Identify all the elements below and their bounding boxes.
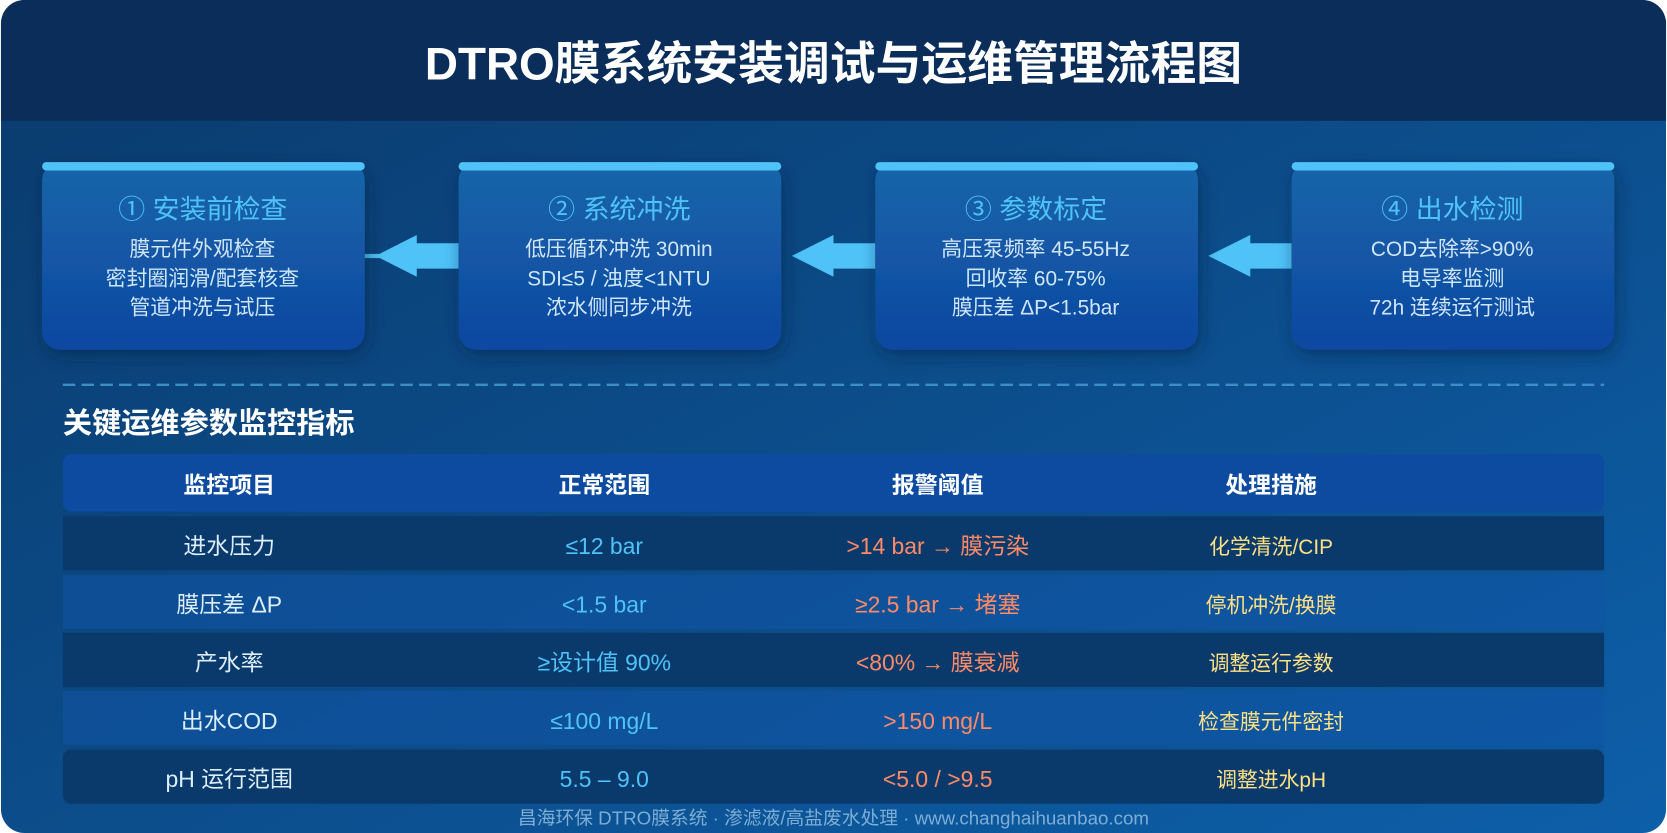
table <box>63 454 1604 804</box>
step 2 details: 低压循环冲洗 30min <box>525 238 713 261</box>
step 4 details: 电导率监测 <box>1400 267 1504 290</box>
step 1 details: 管道冲洗与试压 <box>129 296 275 319</box>
table header <box>63 454 1604 512</box>
row: effluent COD: >150 mg/L <box>883 708 992 734</box>
row: pH: <5.0 / >9.5 <box>883 766 992 792</box>
step 1 details: 密封圈润滑/配套核查 <box>106 267 299 290</box>
step 2 heading: ② 系统冲洗 <box>548 195 690 225</box>
row: effluent COD: 出水COD <box>181 708 278 734</box>
step 2 details: SDI≤5 / 浊度<1NTU <box>527 267 711 290</box>
arrow: step 3 to step 2 <box>792 235 875 277</box>
panel: step 3 <box>875 162 1198 350</box>
footer: 昌海环保 DTRO膜系统 · 渗滤液/高盐废水处理 · www.changhaihuanbao.com <box>518 808 1149 829</box>
panel: step 4 <box>1292 162 1614 350</box>
arrow: step 4 to step 3 <box>1208 235 1292 277</box>
step 2 details: 浓水侧同步冲洗 <box>546 296 692 319</box>
header band <box>0 0 1667 121</box>
title: DTRO膜系统安装调试与运维管理流程图 <box>425 39 1242 90</box>
step 1 details <box>106 238 299 319</box>
step 4 heading: ④ 出水检测 <box>1381 195 1523 225</box>
step 1 heading: ① 安装前检查 <box>118 195 287 225</box>
row: recovery: ≥设计值 90% <box>538 650 671 676</box>
table header: 正常范围 <box>558 472 650 498</box>
row: pH <box>63 750 1604 804</box>
row: feed pressure: 进水压力 <box>183 533 275 559</box>
step 4 details: 72h 连续运行测试 <box>1369 296 1535 319</box>
row: feed pressure: >14 bar → 膜污染 <box>846 533 1029 559</box>
table header: 报警阈值 <box>892 472 984 498</box>
step 4 details: COD去除率>90% <box>1371 238 1534 261</box>
step 3 details: 高压泵频率 45-55Hz <box>941 238 1130 261</box>
row: effluent COD: 检查膜元件密封 <box>1198 711 1344 734</box>
row: transmembrane pressure: 停机冲洗/换膜 <box>1206 594 1336 617</box>
row: recovery: 产水率 <box>195 650 264 676</box>
arrow: step 2 to step 1 <box>365 235 459 277</box>
row: pH: pH 运行范围 <box>166 766 293 792</box>
step 3 details: 回收率 60-75% <box>966 267 1106 290</box>
table header: 监控项目 <box>183 472 275 498</box>
row: feed pressure <box>63 516 1604 570</box>
row: effluent COD <box>63 691 1604 745</box>
row: effluent COD: ≤100 mg/L <box>550 708 658 734</box>
row: pH: 调整进水pH <box>1216 769 1326 792</box>
step 2 details <box>525 238 713 319</box>
row: recovery: <80% → 膜衰减 <box>856 650 1020 676</box>
row: feed pressure: 化学清洗/CIP <box>1209 536 1333 559</box>
step 3 heading: ③ 参数标定 <box>965 195 1107 225</box>
row: transmembrane pressure <box>63 575 1604 629</box>
step 4 details <box>1369 238 1535 319</box>
panel: step 1 <box>42 162 365 350</box>
row: pH: 5.5 – 9.0 <box>560 766 649 792</box>
table header: 处理措施 <box>1225 472 1317 498</box>
step 3 details: 膜压差 ΔP<1.5bar <box>952 296 1119 319</box>
section heading: 关键运维参数监控指标 <box>63 407 355 440</box>
row: transmembrane pressure: ≥2.5 bar → 堵塞 <box>855 591 1020 617</box>
row: recovery: 调整运行参数 <box>1209 653 1334 676</box>
row: transmembrane pressure: 膜压差 ΔP <box>176 591 282 617</box>
step 3 details <box>941 238 1130 319</box>
panel: step 2 <box>459 162 781 350</box>
step 1 details: 膜元件外观检查 <box>129 238 275 261</box>
row: recovery <box>63 633 1604 687</box>
row: transmembrane pressure: <1.5 bar <box>562 591 647 617</box>
row: feed pressure: ≤12 bar <box>566 533 643 559</box>
